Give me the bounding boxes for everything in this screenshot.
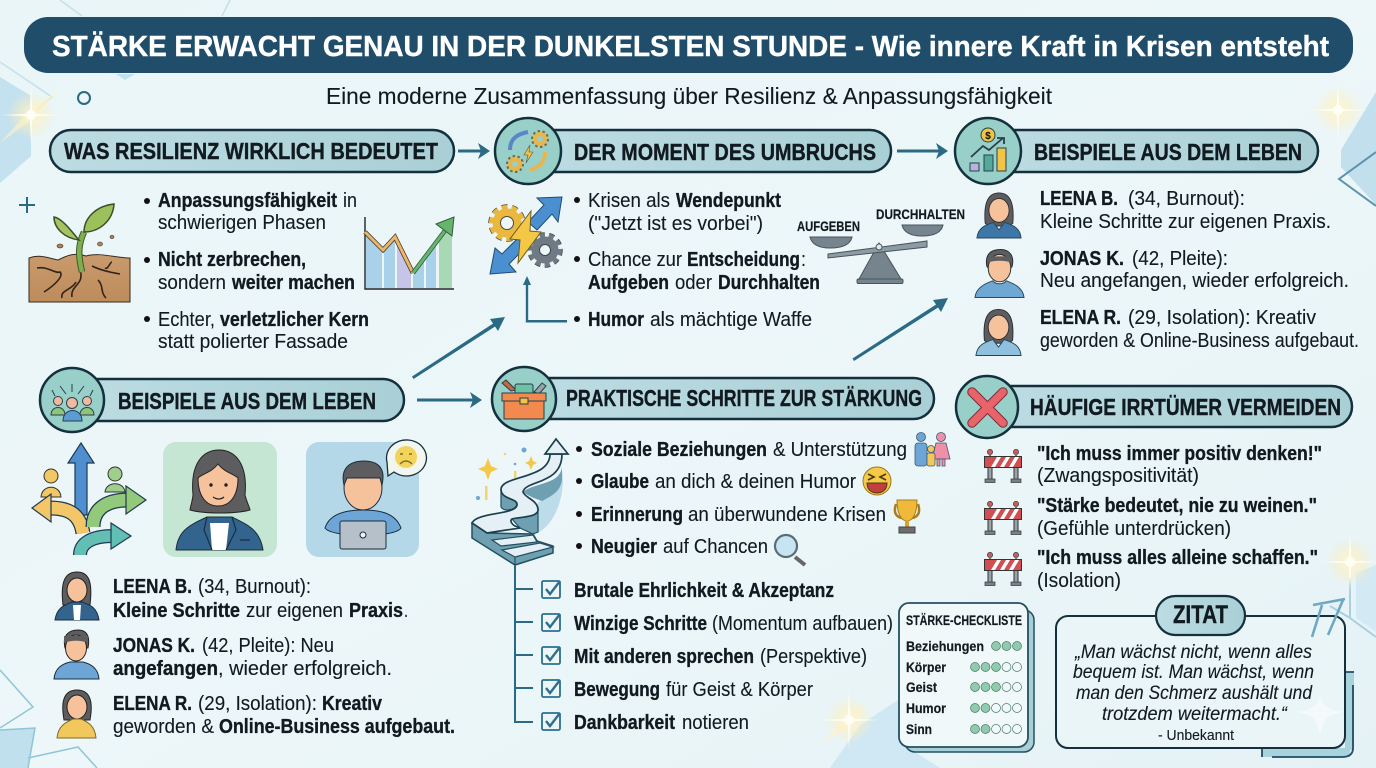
heading: Häufige Irrtümer: [956, 376, 1352, 438]
text: life examples left: (34, Burnout):: [198, 575, 311, 598]
text: life examples left: (29, Isolation):: [198, 692, 317, 715]
text: practical bullets: an überwundene Krisen: [688, 503, 886, 526]
text: resilienz bullets: in: [343, 189, 357, 212]
heading: Beispiele aus dem Leben right: [955, 118, 1318, 184]
text: umbruch bullets: Wendepunkt: [676, 189, 781, 212]
text: practical bullets: Soziale Beziehungen: [591, 438, 767, 461]
text: life examples left: [113, 575, 455, 738]
text: life examples right: ELENA R.: [1040, 306, 1121, 329]
text: life examples right: (42, Pleite):: [1132, 247, 1228, 270]
heading: Praktische Schritte: [492, 367, 934, 431]
text: resilienz bullets: sondern: [158, 271, 226, 294]
icon: barrier 2: [984, 501, 1022, 534]
text: life examples left: Online-Business aufgebaut.: [219, 715, 455, 738]
row: Geist: [906, 679, 1022, 695]
text: life examples left: , wieder erfolgreich.: [218, 657, 392, 680]
text: life examples left: LEENA B.: [113, 575, 192, 598]
row: Sinn: [906, 721, 1022, 737]
icon: laughing emoji: [863, 467, 891, 495]
avatar: Jonas small: [54, 630, 99, 679]
people: life examples right: [975, 193, 1024, 356]
icon: crisis gears, bolt and arrows: [490, 197, 562, 274]
text: practical bullets: [576, 438, 907, 558]
person: green: [105, 467, 125, 492]
text: checklist steps: Mit anderen sprechen: [574, 645, 754, 668]
text: checklist steps: (Perspektive): [760, 645, 867, 668]
text: resilienz bullets: Nicht zerbrechen,: [158, 248, 306, 271]
text: life examples left: Praxis: [349, 599, 403, 622]
text: resilienz bullets: statt polierter Fassade: [158, 330, 348, 353]
avatar: Elena small: [57, 690, 96, 738]
text: checklist steps: Bewegung: [574, 678, 660, 701]
text: checklist steps: (Momentum aufbauen): [712, 612, 893, 635]
text: resilienz bullets: verletzlicher Kern: [220, 308, 369, 331]
icon: staircase with rising path: [472, 439, 568, 565]
icon: trophy: [895, 500, 919, 533]
text: practical bullets: Neugier: [591, 535, 657, 558]
barriers and misconceptions: (Zwangspositivität): [1037, 464, 1199, 487]
badge: Zitat: ZITAT: [1173, 601, 1228, 629]
panel: Zitat: bequem ist. Man wächst, wenn: [1073, 661, 1314, 683]
text: resilienz bullets: schwierigen Phasen: [158, 211, 326, 234]
text: umbruch bullets: als mächtige Waffe: [650, 308, 812, 331]
text: life examples left: Kreativ: [322, 692, 383, 715]
text: life examples left: .: [404, 599, 408, 622]
check item 5: [542, 713, 560, 730]
heading: Beispiele aus dem Leben right: BEISPIELE AUS DEM LEBEN: [1034, 139, 1302, 165]
icon: red cross: [972, 392, 1003, 423]
check item 1: [542, 581, 560, 598]
icon: balance scale: [797, 206, 965, 284]
barriers and misconceptions: [984, 442, 1322, 592]
heading: Der Moment des Umbruchs: DER MOMENT DES UMBRUCHS: [574, 139, 876, 165]
heading: Praktische Schritte: PRAKTISCHE SCHRITTE ZUR STÄRKUNG: [566, 385, 922, 411]
speech bubble with emoji: [386, 440, 426, 476]
icon: barrier 3: [984, 552, 1022, 586]
text: checklist steps: Brutale Ehrlichkeit & Akzeptanz: [574, 579, 834, 602]
icon: balance scale: DURCHHALTEN: [876, 206, 965, 222]
icon: growth chart with coin: $: [985, 131, 991, 142]
arrow: diagonal to beispiele: [852, 298, 948, 361]
panel: Zitat: - Unbekannt: [1158, 727, 1235, 744]
portrait card: woman: [163, 442, 277, 557]
arrow: resilienz to umbruch: [458, 143, 490, 159]
barriers and misconceptions: (Gefühle unterdrücken): [1037, 517, 1231, 540]
icon: family: [915, 432, 950, 466]
barriers and misconceptions: "Ich muss immer positiv denken!": [1037, 442, 1322, 465]
text: life examples left: geworden &: [113, 715, 214, 738]
text: resilienz bullets: Anpassungsfähigkeit: [158, 189, 337, 212]
text: practical bullets: auf Chancen: [663, 535, 768, 558]
heading: Was Resilienz wirklich bedeutet: [50, 130, 454, 172]
check item 4: [542, 680, 560, 697]
heading: Was Resilienz wirklich bedeutet: WAS RESILIENZ WIRKLICH BEDEUTET: [64, 138, 439, 164]
text: umbruch bullets: Aufgeben: [588, 271, 669, 294]
text: life examples right: [1040, 187, 1359, 352]
heading: Beispiele aus dem Leben left: [40, 368, 404, 432]
row: Körper: Körper: [906, 659, 946, 675]
row: Geist: Geist: [906, 679, 937, 695]
row: Körper: [906, 659, 1022, 675]
text: life examples left: zur eigenen: [246, 599, 343, 622]
text: life examples right: Neu angefangen, wieder erfolgreich.: [1040, 269, 1349, 292]
text: life examples right: Kleine Schritte zur eigenen Praxis.: [1040, 210, 1331, 233]
row: Sinn: Sinn: [906, 721, 932, 737]
row: Humor: [906, 700, 1022, 716]
barriers and misconceptions: (Isolation): [1037, 569, 1121, 592]
panel: Zitat: man den Schmerz aushält und: [1076, 682, 1313, 704]
chart: recovery line over bars: [365, 217, 454, 289]
text: resilienz bullets: Echter,: [158, 308, 215, 331]
text: umbruch bullets: Entscheidung: [687, 248, 800, 271]
text: life examples left: ELENA R.: [113, 692, 192, 715]
panel: Zitat: „Man wächst nicht, wenn alles: [1074, 641, 1312, 663]
text: life examples right: JONAS K.: [1040, 247, 1124, 270]
text: life examples right: (29, Isolation): Kreativ: [1128, 306, 1317, 329]
text: life examples right: LEENA B.: [1040, 187, 1118, 210]
text: umbruch bullets: Durchhalten: [718, 271, 820, 294]
heading: Der Moment des Umbruchs: [495, 118, 891, 184]
avatar: Leena small: [55, 572, 99, 620]
arrow: humor to gears: [523, 276, 567, 322]
panel: Zitat: trotzdem weitermacht.“: [1102, 703, 1288, 725]
text: checklist steps: [574, 579, 893, 734]
text: umbruch bullets: Krisen als: [588, 189, 670, 212]
arrow: umbruch to beispiele: [897, 143, 948, 159]
row: Beziehungen: Beziehungen: [906, 638, 984, 654]
panel: Stärke-Checkliste: STÄRKE-CHECKLISTE: [906, 612, 1022, 628]
icon: barrier 1: [984, 449, 1022, 482]
panel: Zitat: [1056, 596, 1354, 757]
barriers and misconceptions: "Stärke bedeutet, nie zu weinen.": [1037, 494, 1317, 517]
icon: crossroads arrows with people: [32, 443, 146, 555]
text: umbruch bullets: ("Jetzt ist es vorbei"): [588, 212, 763, 235]
row: Humor: Humor: [906, 700, 946, 716]
panel: Stärke-Checkliste: [899, 603, 1034, 752]
text: umbruch bullets: Humor: [588, 308, 644, 331]
check item 3: [542, 647, 560, 664]
portrait card: man with laptop: [306, 440, 426, 557]
checklist: five steps: [515, 565, 560, 730]
barriers and misconceptions: "Ich muss alles alleine schaffen.": [1037, 546, 1318, 569]
text: umbruch bullets: oder: [675, 271, 712, 294]
title: STÄRKE ERWACHT GENAU IN DER DUNKELSTEN STUNDE - Wie innere Kraft in Krisen entsteht: [52, 31, 1329, 63]
badge: Zitat: [1156, 596, 1245, 635]
icon: group of people: [51, 384, 94, 421]
text: umbruch bullets: [574, 189, 820, 331]
icon: balance scale: AUFGEBEN: [797, 218, 860, 234]
icon: magnifier: [775, 535, 805, 565]
heading: Beispiele aus dem Leben left: BEISPIELE AUS DEM LEBEN: [118, 388, 376, 414]
subtitle: Eine moderne Zusammenfassung über Resilienz & Anpassungsfähigkeit: [326, 83, 1052, 109]
avatar: Leena: [977, 193, 1021, 238]
arrow: diagonal to umbruch: [412, 317, 505, 379]
people: life examples left: [54, 572, 99, 738]
text: life examples left: angefangen: [113, 657, 218, 680]
icon: change gears: [507, 131, 548, 172]
text: umbruch bullets: Chance zur: [588, 248, 682, 271]
text: umbruch bullets: :: [801, 248, 806, 271]
text: resilienz bullets: [144, 189, 369, 353]
text: resilienz bullets: weiter machen: [231, 271, 355, 294]
avatar: Jonas: [975, 249, 1024, 298]
arrow: beispiele to schritte: [417, 392, 482, 408]
text: life examples left: (42, Pleite): Neu: [202, 634, 334, 657]
icon: plus: [19, 197, 35, 213]
icon: sprout in soil: [29, 204, 130, 302]
icon: growth chart with coin: [970, 128, 1006, 171]
text: life examples right: (34, Burnout):: [1128, 187, 1245, 210]
title: [24, 17, 1353, 73]
icon: small circle: [78, 92, 90, 104]
text: checklist steps: für Geist & Körper: [666, 678, 813, 701]
icon: toolbox: [502, 380, 546, 419]
check item 2: [542, 614, 560, 631]
text: checklist steps: Winzige Schritte: [574, 612, 707, 635]
text: practical bullets: Erinnerung: [591, 503, 683, 526]
text: practical bullets: an dich & deinen Humor: [655, 470, 856, 493]
text: checklist steps: notieren: [682, 711, 749, 734]
avatar: Elena: [976, 309, 1021, 356]
text: practical bullets: & Unterstützung: [773, 438, 907, 461]
text: life examples left: JONAS K.: [113, 634, 195, 657]
text: life examples left: Kleine Schritte: [113, 599, 240, 622]
text: practical bullets: Glaube: [591, 470, 649, 493]
text: checklist steps: Dankbarkeit: [574, 711, 675, 734]
person: yellow: [41, 469, 61, 497]
decorative marks over quote card: [1297, 599, 1345, 735]
